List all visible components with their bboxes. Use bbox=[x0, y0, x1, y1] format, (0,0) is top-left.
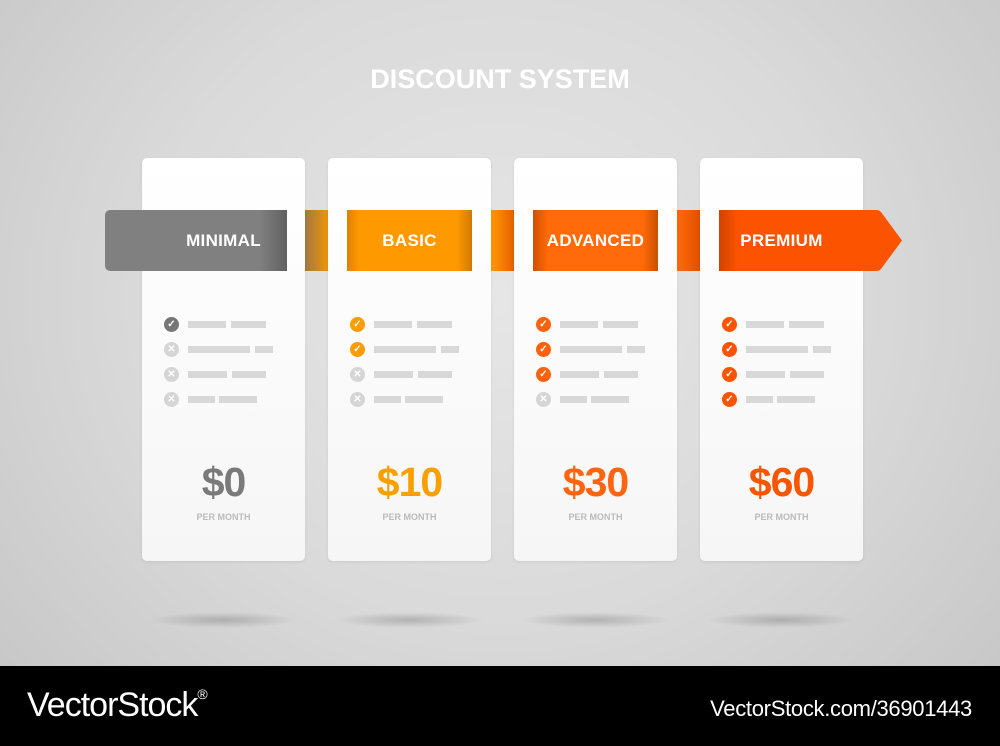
card: premium: ✓ bbox=[725, 319, 734, 330]
card: minimal bbox=[142, 158, 305, 561]
ribbon: advanced: ADVANCED bbox=[547, 230, 644, 250]
card: advanced bbox=[514, 158, 677, 561]
ribbon connectors bbox=[305, 210, 328, 271]
card: minimal: PER MONTH bbox=[196, 512, 250, 522]
card: basic: $10 bbox=[377, 459, 442, 505]
card: basic: ✕ bbox=[353, 369, 362, 380]
card: basic: ✓ bbox=[353, 344, 362, 355]
card: basic: ✓ bbox=[353, 319, 362, 330]
card: premium: $60 bbox=[749, 459, 814, 505]
ribbon: basic bbox=[347, 210, 472, 271]
card: advanced: ✓ bbox=[539, 344, 548, 355]
card: minimal: $0 bbox=[202, 459, 245, 505]
card: basic: ✕ bbox=[353, 394, 362, 405]
ribbon: minimal bbox=[105, 210, 287, 271]
ribbon: premium arrow: PREMIUM bbox=[740, 230, 823, 250]
title: DISCOUNT SYSTEM bbox=[370, 64, 630, 94]
ribbon: basic: BASIC bbox=[382, 230, 437, 250]
ribbon: advanced bbox=[533, 210, 658, 271]
card: advanced: ✕ bbox=[539, 394, 548, 405]
card: minimal: ✕ bbox=[167, 344, 176, 355]
card: basic bbox=[328, 158, 491, 561]
card: premium bbox=[700, 158, 863, 561]
card: basic: PER MONTH bbox=[382, 512, 436, 522]
card: premium: ✓ bbox=[725, 344, 734, 355]
footer bar bbox=[0, 666, 1000, 746]
card: advanced: ✓ bbox=[539, 369, 548, 380]
card: advanced: $30 bbox=[563, 459, 628, 505]
footer bar: VectorStock.com/36901443 bbox=[710, 696, 972, 721]
card: minimal: ✕ bbox=[167, 394, 176, 405]
card: minimal: ✕ bbox=[167, 369, 176, 380]
ribbon: minimal: MINIMAL bbox=[186, 230, 261, 250]
card: minimal: ✓ bbox=[167, 319, 176, 330]
card: advanced: ✓ bbox=[539, 319, 548, 330]
card: premium: ✓ bbox=[725, 394, 734, 405]
footer bar: VectorStock® bbox=[27, 686, 207, 724]
card: premium: PER MONTH bbox=[754, 512, 808, 522]
card: premium: ✓ bbox=[725, 369, 734, 380]
card: advanced: PER MONTH bbox=[568, 512, 622, 522]
ribbon: premium arrow bbox=[719, 210, 902, 271]
